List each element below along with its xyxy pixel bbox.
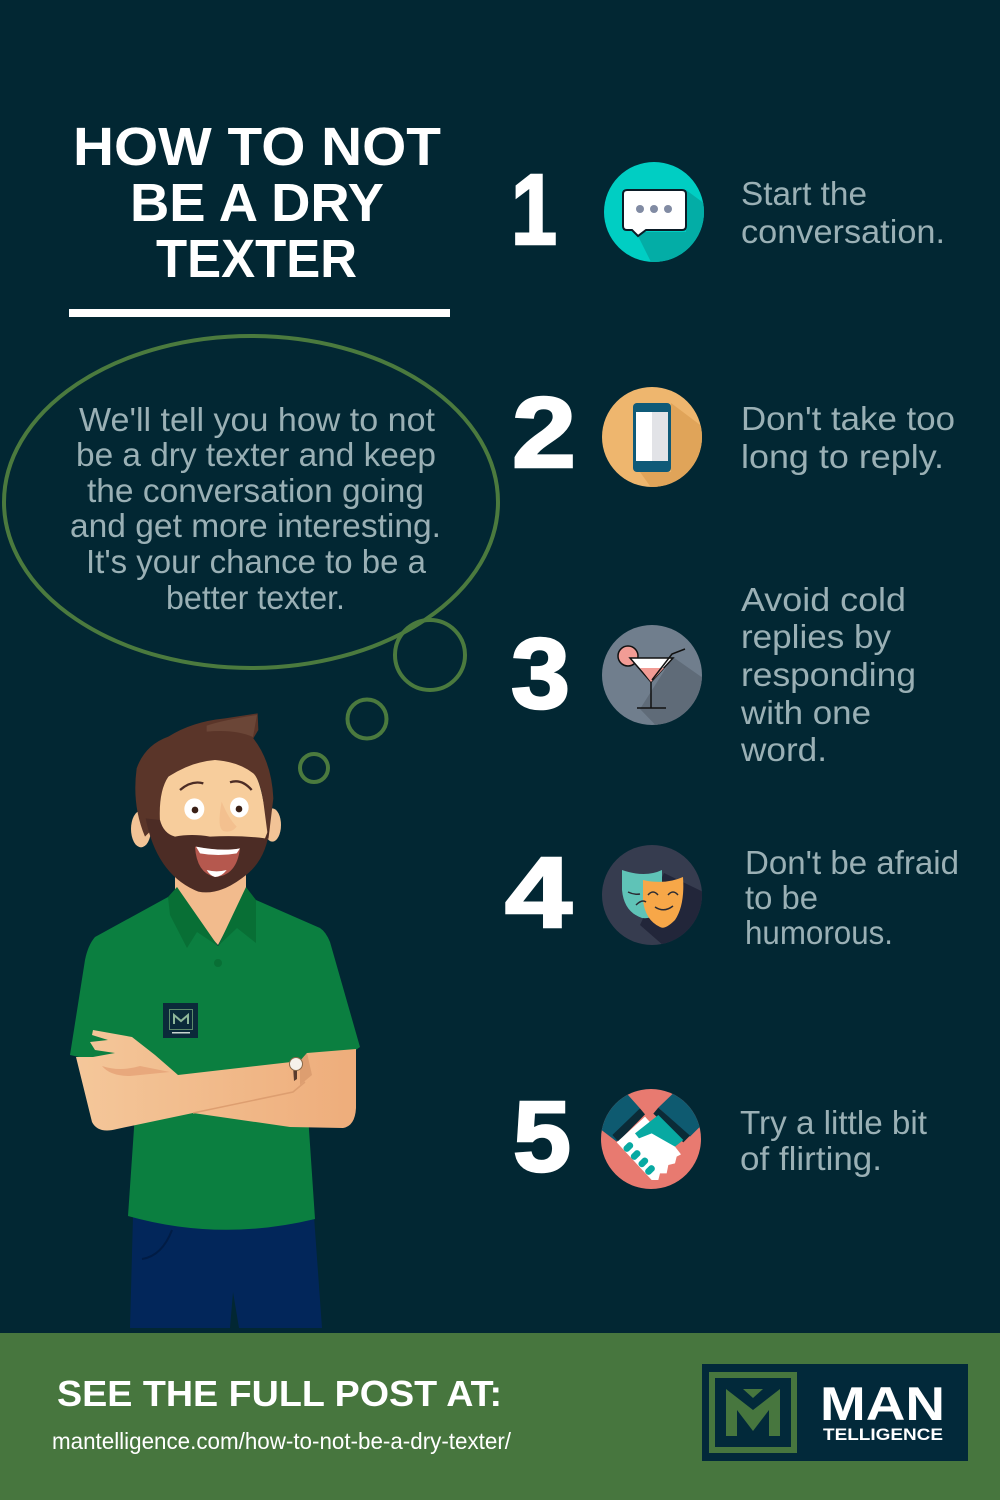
thought bubble — [4, 336, 498, 782]
mouth — [195, 847, 240, 877]
step 1 — [515, 162, 942, 262]
icon: cocktail — [602, 625, 702, 725]
step 4: 4 — [505, 837, 572, 949]
nose — [220, 802, 237, 832]
text: Don't take too — [741, 400, 955, 437]
step 2: 2 — [512, 377, 576, 489]
text — [745, 844, 959, 951]
character: man with crossed arms — [70, 713, 360, 1328]
step 5: 5 — [513, 1081, 571, 1193]
shirt — [70, 897, 360, 1230]
intro text: We'll tell you how to not — [79, 401, 435, 438]
logo — [702, 1364, 968, 1461]
ears — [131, 811, 151, 847]
crossed arms — [76, 1030, 356, 1130]
step 1: 1 — [511, 154, 557, 266]
text: Start the — [741, 175, 867, 212]
shirt badge — [163, 1003, 198, 1038]
intro text: It's your chance to be a — [86, 543, 427, 580]
intro text — [70, 401, 441, 616]
text: word. — [740, 731, 827, 768]
step 5 — [514, 1089, 927, 1189]
eyes — [184, 798, 204, 820]
teeth — [196, 847, 240, 877]
step 4 — [505, 845, 957, 945]
step 2 — [514, 387, 954, 487]
step 3 — [511, 581, 916, 768]
title underline — [69, 309, 450, 317]
text: with one — [740, 694, 871, 731]
text — [741, 175, 945, 250]
face — [158, 758, 268, 865]
finger shading — [102, 1066, 170, 1076]
text: Try a little bit — [740, 1104, 927, 1141]
neck — [175, 875, 246, 945]
footer url: mantelligence.com/how-to-not-be-a-dry-texter/ — [52, 1428, 512, 1454]
hair highlight — [207, 715, 257, 737]
icon: theatre masks — [602, 845, 702, 945]
text: Don't be afraid — [745, 844, 959, 881]
text: long to reply. — [741, 438, 944, 475]
footer heading: SEE THE FULL POST AT: — [57, 1373, 502, 1414]
wrist shade — [300, 1053, 312, 1085]
text: to be — [745, 879, 818, 916]
watch — [290, 1058, 302, 1081]
text: Avoid cold — [741, 581, 906, 618]
icon: handshake — [601, 1089, 701, 1189]
text: humorous. — [745, 914, 893, 951]
text: replies by — [741, 618, 892, 655]
logo: TELLIGENCE — [823, 1426, 943, 1444]
text: conversation. — [741, 213, 945, 250]
intro text: better texter. — [166, 579, 345, 616]
text: of flirting. — [740, 1140, 882, 1177]
step 3: 3 — [511, 618, 570, 730]
text — [741, 400, 955, 475]
title: HOW TO NOT — [73, 117, 441, 177]
logo: MAN — [820, 1377, 945, 1430]
icon: chat bubble — [604, 162, 704, 262]
footer band — [0, 1333, 1000, 1500]
head — [131, 713, 281, 892]
text — [740, 1104, 927, 1177]
icon: phone — [602, 387, 702, 487]
title: TEXTER — [156, 229, 357, 289]
intro text: be a dry texter and keep — [76, 436, 436, 473]
intro text: and get more interesting. — [70, 507, 441, 544]
trouser pocket — [142, 1230, 172, 1259]
arm crease — [193, 1082, 305, 1113]
title: BE A DRY — [130, 173, 384, 233]
hair — [135, 713, 273, 840]
text: responding — [741, 656, 916, 693]
beard — [146, 818, 270, 892]
title — [73, 117, 441, 289]
shirt button — [214, 959, 222, 967]
eyebrows — [180, 781, 252, 790]
intro text: the conversation going — [87, 472, 424, 509]
trousers — [130, 1216, 322, 1328]
text — [740, 581, 916, 768]
collar — [168, 887, 256, 948]
